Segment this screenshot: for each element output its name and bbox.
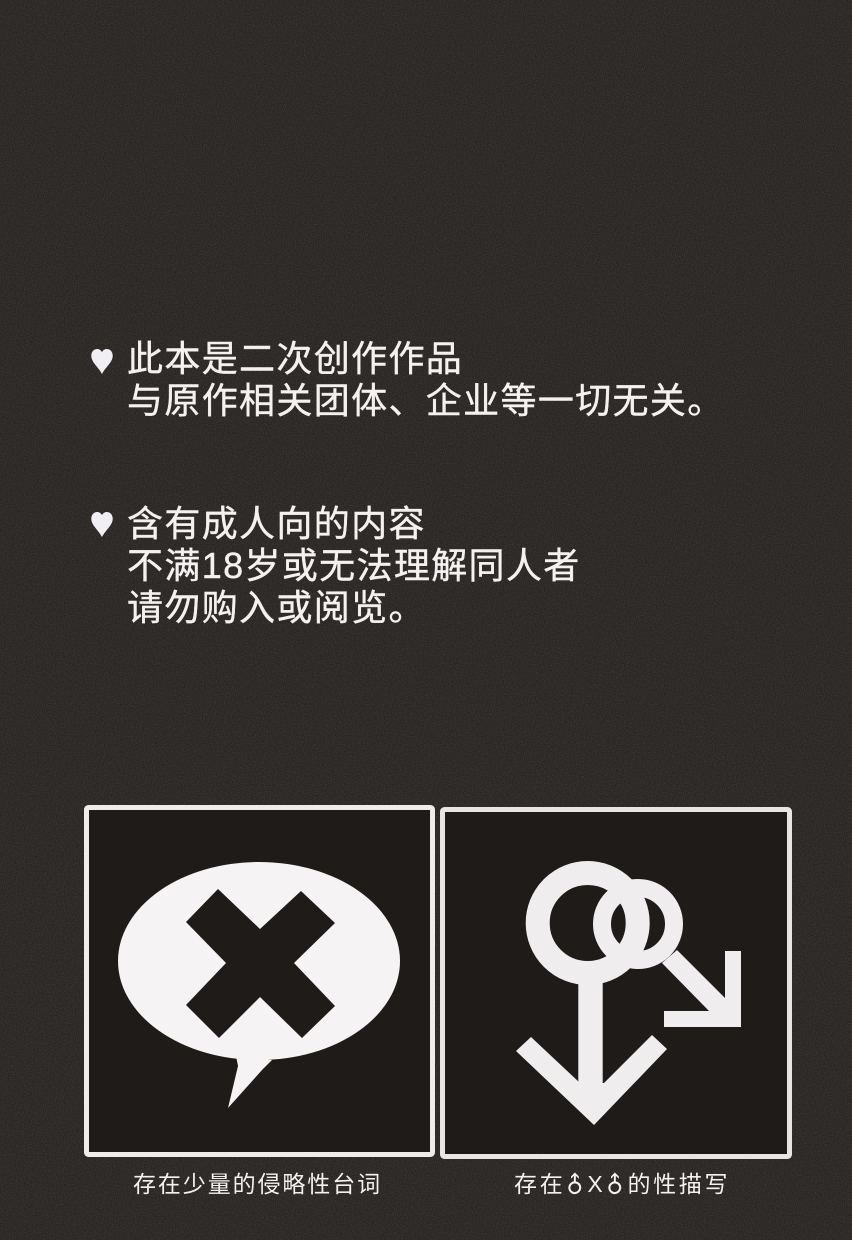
icon: heart bullet bbox=[91, 349, 113, 374]
caption: sexual content: ♂ bbox=[559, 1167, 594, 1202]
icon: interlocked male symbols bbox=[440, 807, 792, 1159]
text line: 请勿购入或阅览: 请勿购入或阅览。 bbox=[127, 587, 426, 628]
text line: 不满18岁: 不满18岁或无法理解同人者 bbox=[127, 545, 581, 586]
icon: speech bubble with X bbox=[84, 805, 435, 1157]
panel: speech warning bbox=[84, 805, 435, 1157]
text line: 与原作相关团体: 与原作相关团体、企业等一切无关。 bbox=[127, 380, 725, 421]
caption: sexual content: 存在 X 的性描写 bbox=[514, 1171, 730, 1197]
notice block: derivative work disclaimer bbox=[91, 338, 725, 421]
text line: 含有成人向的内容: 含有成人向的内容 bbox=[127, 503, 426, 544]
caption: speech warning: 存在少量的侵略性台词 bbox=[133, 1171, 382, 1197]
panel: sexual content bbox=[440, 807, 792, 1159]
notice block: adult content warning bbox=[91, 503, 581, 628]
caption: sexual content: ♂ bbox=[599, 1167, 634, 1202]
text line: 此本是二次创作作品: 此本是二次创作作品 bbox=[127, 338, 463, 379]
icon: heart bullet bbox=[91, 512, 113, 537]
